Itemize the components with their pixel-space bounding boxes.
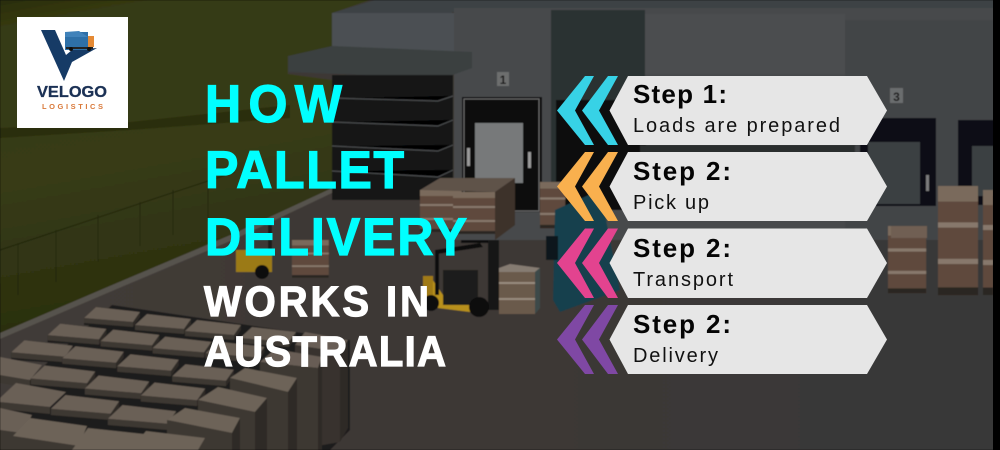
title — [204, 74, 467, 375]
title: HOW — [205, 74, 342, 133]
title: AUSTRALIA — [204, 328, 446, 375]
forklift main — [423, 240, 499, 317]
tall stack B — [260, 349, 322, 450]
main wall — [454, 8, 1000, 240]
dock door centre — [640, 145, 855, 220]
step 3 heading: Step 2: — [633, 233, 731, 263]
step 4 heading: Step 2: — [633, 309, 731, 339]
logo V mark — [41, 30, 97, 81]
step 4 chevrons — [557, 305, 618, 374]
title: DELIVERY — [205, 207, 467, 266]
number plate 1: 1 — [500, 73, 507, 87]
fence line — [0, 172, 235, 295]
step 4 card — [610, 305, 887, 374]
tall stack D — [198, 387, 267, 450]
foreground pallet group — [0, 305, 350, 450]
title: PALLET — [205, 140, 404, 199]
number plate 3: 3 — [893, 90, 900, 104]
logo tagline: LOGISTICS — [42, 102, 103, 111]
warehouse roof — [332, 0, 1000, 24]
left edge box row 3 — [0, 357, 42, 388]
step 2 heading: Step 2: — [633, 156, 731, 186]
dock door 4 — [958, 120, 1000, 205]
step 1 card — [610, 76, 887, 145]
logo badge — [17, 17, 128, 128]
step 1 chevrons — [557, 76, 618, 145]
office block upper — [332, 13, 454, 58]
step 4 row — [557, 305, 887, 374]
step 4 description: Delivery — [633, 345, 718, 367]
number plate 3 — [890, 88, 903, 104]
field shadow — [0, 105, 290, 138]
step 2 card — [610, 152, 887, 221]
step 2 chevrons — [557, 152, 618, 221]
step 3 description: Transport — [633, 269, 733, 291]
left edge box row 4 — [0, 383, 66, 414]
right edge black strip — [993, 0, 1000, 450]
step 1 description: Loads are prepared — [633, 115, 840, 137]
dock door 2 — [556, 100, 646, 210]
step 2 row — [557, 152, 887, 221]
dock door 3 — [860, 118, 936, 206]
canopy — [288, 46, 472, 78]
tall stack E — [167, 408, 240, 450]
step 3 row — [557, 228, 887, 298]
logo wordmark: VELOGO — [37, 84, 107, 101]
back tall stack — [295, 332, 348, 450]
title: WORKS IN — [204, 278, 429, 325]
step 3 chevrons — [557, 228, 618, 298]
forklift pallet — [499, 264, 540, 314]
step 1 heading: Step 1: — [633, 79, 727, 109]
tall stack C — [230, 368, 297, 450]
number plate 1 — [497, 72, 509, 87]
field — [0, 0, 370, 333]
front row boxes — [13, 418, 87, 450]
dock door 1 — [462, 97, 542, 212]
left edge box front — [0, 408, 32, 450]
glass front — [332, 75, 453, 200]
step 2 description: Pick up — [633, 192, 709, 214]
step 3 card — [610, 228, 887, 298]
road kerb — [0, 188, 334, 339]
right pallets — [888, 226, 926, 293]
truck — [546, 190, 620, 312]
yellow forklift left — [236, 222, 329, 279]
step 1 row — [557, 76, 887, 145]
pallets near door — [420, 190, 461, 232]
